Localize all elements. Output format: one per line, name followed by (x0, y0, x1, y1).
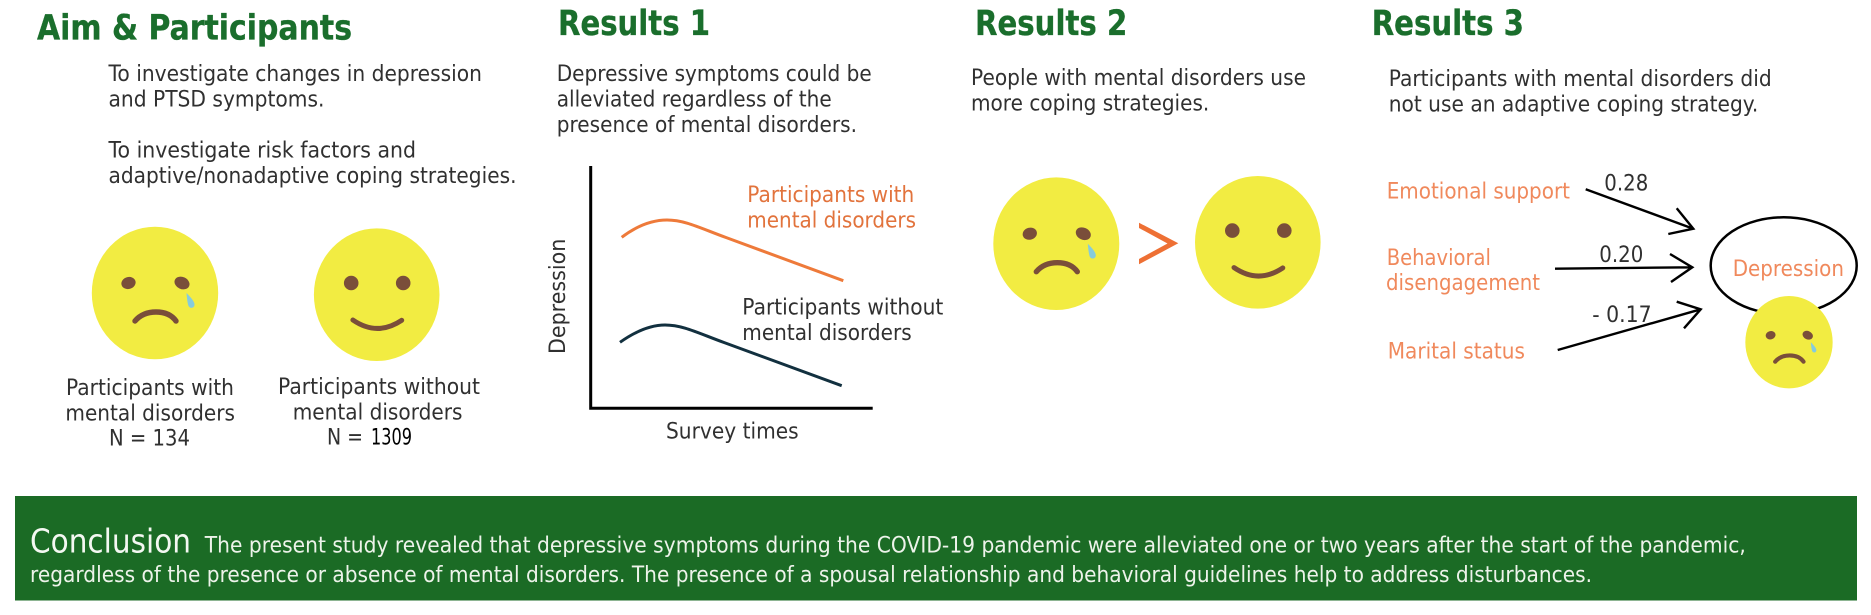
line: participants with mental disorders (622, 220, 843, 281)
node: depression oval (1711, 217, 1857, 314)
text block: aims: To investigate risk factors and (108, 137, 416, 163)
heading: results 1: Results 1 (558, 4, 710, 44)
label: participants without mental disorders: 1309 (371, 424, 412, 450)
label: participants without mental disorders: N = (327, 424, 363, 450)
text block: results 1 finding: alleviated regardless of the (557, 86, 832, 112)
arrow: marital status to depression (1558, 302, 1701, 350)
heading: results 3: Results 3 (1372, 4, 1524, 44)
arrow: emotional support to depression (1586, 189, 1693, 234)
predictor label: marital status: Marital status (1388, 339, 1525, 365)
predictor label: emotional support: Emotional support (1387, 178, 1570, 204)
text block: results 3 finding (1389, 66, 1772, 118)
heading: results 2: Results 2 (975, 4, 1127, 44)
x axis label: Survey times (666, 418, 799, 444)
icon: sad face with tear (993, 177, 1119, 310)
icon: happy face (314, 228, 440, 361)
text block: results 2 finding: more coping strategies. (971, 90, 1209, 116)
predictor label: behavioral disengagement: Behavioral (1387, 245, 1491, 271)
y axis label: Depression (545, 239, 571, 354)
text block: results 2 finding: People with mental disorders use (971, 65, 1306, 91)
predictor label: behavioral disengagement: disengagement (1386, 270, 1540, 296)
text block: aims: and PTSD symptoms. (108, 87, 324, 113)
panel: conclusion banner (15, 496, 1857, 600)
node: depression oval: Depression (1733, 256, 1844, 282)
text block: results 3 finding: Participants with mental disorders did (1389, 66, 1772, 92)
coefficient: 0.28: 0.28 (1604, 171, 1648, 197)
panel: results 3 (1372, 4, 1857, 388)
label: orange line: Participants with (747, 182, 914, 208)
predictor label: behavioral disengagement (1386, 245, 1540, 296)
icon: sad face with tear (92, 227, 218, 359)
text block: aims (108, 61, 517, 189)
heading: aim and participants: Aim & Participants (37, 8, 352, 48)
chart axes (591, 166, 873, 408)
icon: greater-than sign (1139, 223, 1178, 264)
label: dark line (742, 295, 944, 346)
text block: results 1 finding: presence of mental disorders. (557, 112, 857, 138)
text block: conclusion statement: The present study revealed that depressive symptoms during the COVID-19 pandemic were alleviated one or two years after the start of the pandemic, (204, 534, 1746, 559)
line: participants without mental disorders (620, 325, 842, 386)
icon: small sad face with tear (1745, 296, 1833, 388)
coefficient: 0.20: 0.20 (1599, 242, 1643, 268)
panel: aim and participants (37, 8, 516, 452)
panel: results 2 (971, 4, 1321, 310)
line chart: depression over survey times (545, 166, 944, 444)
label: participants without mental disorders: Participants without (278, 374, 480, 400)
icon: happy face (1195, 176, 1321, 309)
label: participants with mental disorders: N = 134 (109, 426, 190, 452)
text block: conclusion statement: regardless of the presence or absence of mental disorders. The presence of a spousal relationship and behavioral guidelines help to address disturbances. (30, 563, 1592, 588)
text block: results 1 finding (557, 61, 872, 138)
label: participants without mental disorders (278, 374, 480, 450)
label: dark line: Participants without (742, 295, 944, 321)
label: orange line (747, 182, 916, 234)
label: participants without mental disorders: mental disorders (293, 399, 462, 425)
heading: conclusion: Conclusion (30, 522, 191, 560)
label: dark line: mental disorders (742, 320, 912, 346)
text block: aims: To investigate changes in depression (108, 61, 482, 87)
banner background (15, 496, 1857, 600)
arrow: behavioral disengagement to depression (1555, 254, 1692, 282)
panel: results 1 (545, 4, 944, 444)
text block: results 1 finding: Depressive symptoms could be (557, 61, 872, 87)
text block: results 3 finding: not use an adaptive coping strategy. (1389, 92, 1758, 118)
label: participants with mental disorders: Participants with (66, 375, 234, 401)
text block: aims: adaptive/nonadaptive coping strategies. (108, 163, 516, 189)
text block: results 2 finding (971, 65, 1306, 116)
label: orange line: mental disorders (747, 208, 916, 234)
label: participants with mental disorders: mental disorders (65, 401, 235, 427)
text block: conclusion statement (30, 534, 1746, 588)
label: participants with mental disorders (65, 375, 235, 452)
coefficient: -0.17: - 0.17 (1592, 302, 1652, 328)
